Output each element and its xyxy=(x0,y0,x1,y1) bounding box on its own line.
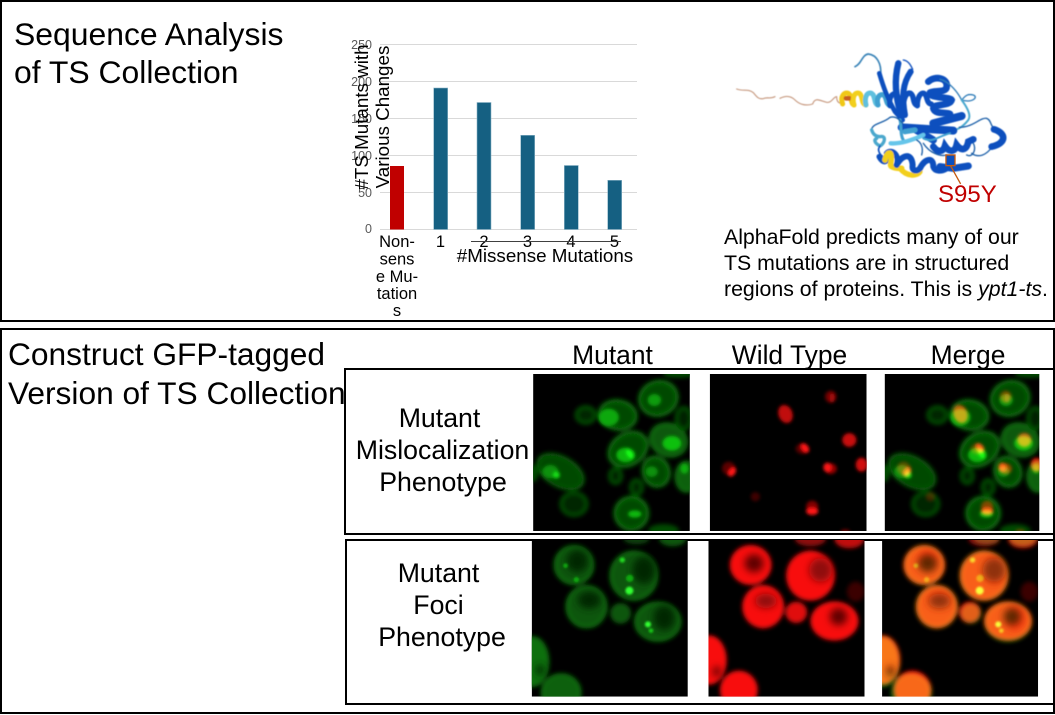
heading: sequence analysis: Sequence Analysis xyxy=(14,16,283,52)
heading: sequence analysis: of TS Collection xyxy=(14,54,239,90)
x axis category labels xyxy=(376,233,619,320)
label: mutant mislocalization phenotype: Mutant xyxy=(399,403,480,433)
x axis category labels: 1 xyxy=(436,233,445,251)
x axis category labels: e Mu- xyxy=(376,268,418,286)
y axis tick labels: 50 xyxy=(358,186,372,200)
x axis category labels: 4 xyxy=(566,233,576,251)
x axis category labels: Non- xyxy=(379,233,415,251)
panel: GFP-tagged collection xyxy=(1,329,1054,713)
y axis tick labels: 150 xyxy=(351,112,372,126)
heading: construct GFP-tagged version: Construct GFP-tagged xyxy=(8,336,325,372)
y axis tick labels: 100 xyxy=(351,149,372,163)
y axis tick labels: 250 xyxy=(351,38,372,52)
x axis category labels: 5 xyxy=(610,233,619,251)
x axis category labels: sens xyxy=(380,250,414,268)
y axis tick labels xyxy=(351,38,372,236)
column headers: Merge xyxy=(931,340,1005,370)
column headers: Wild Type xyxy=(732,340,847,370)
x axis category labels: tation xyxy=(377,285,417,303)
heading: construct GFP-tagged version: Version of TS Collection xyxy=(8,375,346,411)
micrograph: mutant mislocalization xyxy=(533,374,690,531)
column headers: Mutant xyxy=(572,340,654,370)
y axis tick labels: 0 xyxy=(365,222,372,236)
x axis category labels: s xyxy=(393,302,401,320)
label: mutant foci phenotype: Foci xyxy=(413,590,464,620)
bar: nonsense mutations xyxy=(390,166,404,230)
bars: missense mutations xyxy=(434,88,622,230)
micrograph: wild type nuclei xyxy=(710,374,867,533)
row: mislocalization phenotype xyxy=(345,369,1054,535)
label: mutant mislocalization phenotype: Phenotype xyxy=(379,467,507,497)
label: S95Y: S95Y xyxy=(938,181,997,208)
x axis category labels: 2 xyxy=(479,233,489,251)
micrograph: merge mislocalization xyxy=(884,374,1040,531)
AlphaFold description text: regions of proteins. This is ypt1-ts. xyxy=(724,277,1048,301)
micrograph: mutant foci xyxy=(532,540,688,697)
panel: sequence analysis xyxy=(1,1,1054,321)
x axis title: #Missense Mutations xyxy=(457,245,633,266)
row: foci phenotype xyxy=(346,530,1054,710)
y axis tick labels: 200 xyxy=(351,75,372,89)
micrograph: wild type cytoplasm xyxy=(708,540,864,697)
x axis category labels: 3 xyxy=(523,233,532,251)
label: mutant foci phenotype: Phenotype xyxy=(378,622,506,652)
column headers xyxy=(572,340,1005,370)
y axis title: Various Changes xyxy=(372,46,393,188)
AlphaFold description text: TS mutations are in structured xyxy=(724,251,1009,275)
mutation site marker xyxy=(946,155,961,184)
AlphaFold description text: AlphaFold predicts many of our xyxy=(724,225,1019,249)
label: mutant foci phenotype: Mutant xyxy=(398,558,479,588)
y axis title: #TS Mutants with xyxy=(351,44,372,190)
protein structure: AlphaFold ypt1-ts xyxy=(737,54,1003,184)
label: mutant mislocalization phenotype: Mislocalization xyxy=(356,435,529,465)
micrograph: merge foci xyxy=(882,540,1038,697)
bar chart: mutation counts xyxy=(351,38,637,320)
